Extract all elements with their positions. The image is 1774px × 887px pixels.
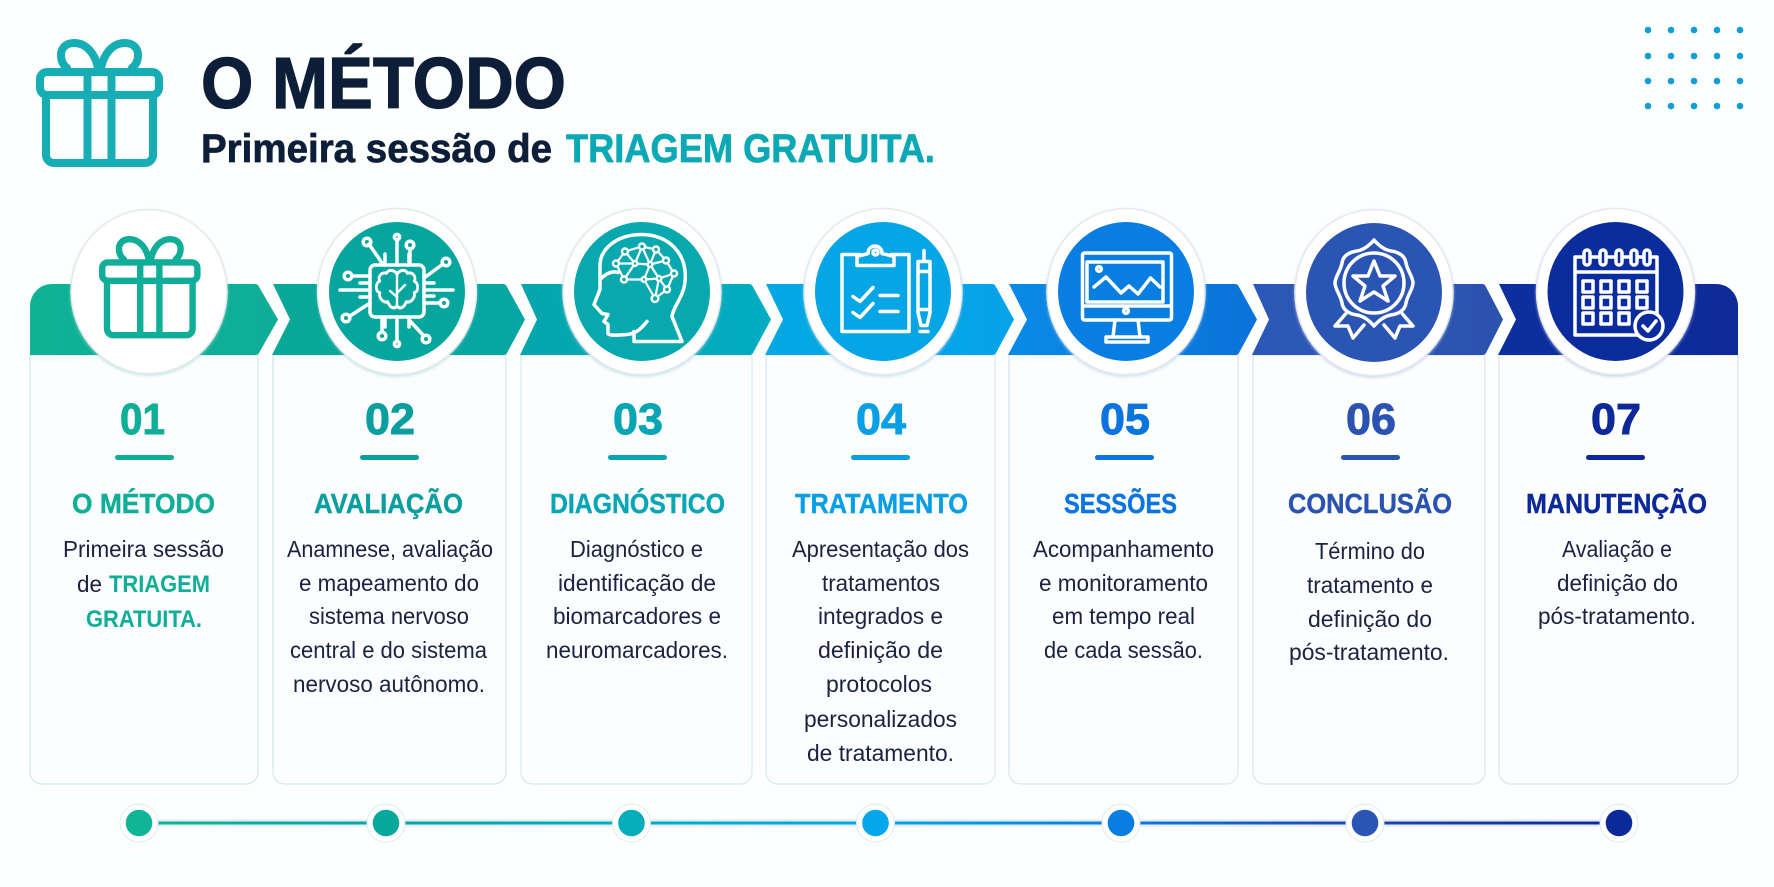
text: step 5 description: de cada sessão. xyxy=(1044,637,1203,663)
text: step 5 description xyxy=(1033,536,1214,663)
text: step 7 description: Avaliação e xyxy=(1562,536,1672,562)
heading: DIAGNÓSTICO: DIAGNÓSTICO xyxy=(550,488,725,519)
text: step 2 description: nervoso autônomo. xyxy=(293,671,485,697)
underline 6 xyxy=(1341,455,1400,460)
card 2 xyxy=(273,355,506,784)
text: step 7 description: pós-tratamento. xyxy=(1538,603,1696,629)
text: step 3 description: Diagnóstico e xyxy=(570,536,703,562)
underline 5 xyxy=(1095,455,1154,460)
text: step 4 description: definição de xyxy=(818,637,943,663)
heading: AVALIAÇÃO: AVALIAÇÃO xyxy=(314,488,463,519)
icon circle 2: circuit brain xyxy=(317,208,477,377)
heading: TRATAMENTO: TRATAMENTO xyxy=(795,488,968,519)
decorative dot grid xyxy=(1645,27,1743,109)
chevron band 2 xyxy=(272,284,525,355)
text: step 2 description: Anamnese, avaliação xyxy=(287,536,493,562)
panel: step 6 xyxy=(1252,210,1503,784)
chevron band 3 xyxy=(520,284,771,355)
heading: SESSÕES: SESSÕES xyxy=(1064,488,1177,519)
heading: CONCLUSÃO: CONCLUSÃO xyxy=(1288,488,1452,519)
text: step 1 description xyxy=(63,536,224,633)
number 06: 06 xyxy=(1346,395,1396,444)
text: step 3 description: biomarcadores e xyxy=(553,603,721,629)
text: step 6 description: definição do xyxy=(1308,606,1432,632)
text: step 3 description: neuromarcadores. xyxy=(546,637,728,663)
heading: MANUTENÇÃO: MANUTENÇÃO xyxy=(1526,488,1707,519)
underline 1 xyxy=(115,455,174,460)
underline 2 xyxy=(360,455,419,460)
text: step 4 description: de tratamento. xyxy=(807,740,954,766)
number 07: 07 xyxy=(1591,395,1641,444)
text: step 6 description: pós-tratamento. xyxy=(1289,639,1449,665)
chevron band 4 xyxy=(765,284,1014,355)
chevron band 5 xyxy=(1008,284,1257,355)
number 01: 01 xyxy=(120,395,165,444)
panel: step 2 xyxy=(272,208,525,784)
timeline xyxy=(120,804,1638,842)
panel: step 5 xyxy=(1008,208,1257,784)
text: step 3 description: identificação de xyxy=(558,570,716,596)
text: step 7 description: definição do xyxy=(1557,570,1678,596)
subtitle: Primeira sessão de xyxy=(201,127,552,171)
subtitle: TRIAGEM GRATUITA. xyxy=(566,127,935,171)
panel: step 7 xyxy=(1498,208,1738,784)
icon circle 7: calendar xyxy=(1536,208,1696,377)
card 1 xyxy=(30,355,258,784)
panel: step 1 xyxy=(30,210,278,784)
text: step 5 description: e monitoramento xyxy=(1039,570,1208,596)
text: step 2 description xyxy=(287,536,493,697)
text: step 1 description: TRIAGEM xyxy=(109,571,210,598)
icon circle 1: gift xyxy=(70,210,228,376)
number 03: 03 xyxy=(613,395,663,444)
underline 3 xyxy=(608,455,667,460)
card 7 xyxy=(1499,355,1738,784)
underline 7 xyxy=(1586,455,1645,460)
text: step 2 description: central e do sistema xyxy=(290,637,487,663)
chevron band 7 xyxy=(1498,284,1738,355)
card 3 xyxy=(521,355,752,784)
text: step 4 description xyxy=(792,536,969,766)
card 6 xyxy=(1253,355,1485,784)
underline 4 xyxy=(851,455,910,460)
text: step 5 description: em tempo real xyxy=(1052,603,1195,629)
number 05: 05 xyxy=(1100,395,1150,444)
text: step 1 description: de xyxy=(77,571,102,597)
text: step 2 description: sistema nervoso xyxy=(309,603,469,629)
number 04: 04 xyxy=(856,395,907,444)
text: step 4 description: integrados e xyxy=(818,603,943,629)
chevron band 1 xyxy=(30,284,278,355)
number 02: 02 xyxy=(365,395,415,444)
subtitle xyxy=(201,127,935,171)
text: step 2 description: e mapeamento do xyxy=(299,570,479,596)
panel: step 4 xyxy=(765,208,1014,784)
text: step 6 description: tratamento e xyxy=(1307,572,1433,598)
panel: step 3 xyxy=(520,208,771,784)
icon circle 3: head with neural network xyxy=(562,208,722,377)
text: step 4 description: protocolos xyxy=(826,671,932,697)
card 4 xyxy=(766,355,995,784)
text: step 6 description xyxy=(1289,538,1449,665)
text: step 4 description: tratamentos xyxy=(822,570,940,596)
text: step 4 description: personalizados xyxy=(804,706,957,732)
icon circle 4: clipboard and pen xyxy=(803,208,963,377)
title: O MÉTODO xyxy=(201,44,566,124)
chevron band 6 xyxy=(1252,284,1503,355)
icon: header gift xyxy=(40,43,159,163)
text: step 7 description xyxy=(1538,536,1696,629)
icon circle 6: award rosette xyxy=(1294,210,1454,378)
text: step 3 description xyxy=(546,536,728,663)
text: step 6 description: Término do xyxy=(1315,538,1425,564)
text: step 5 description: Acompanhamento xyxy=(1033,536,1214,562)
heading: O MÉTODO: O MÉTODO xyxy=(72,488,215,519)
card 5 xyxy=(1009,355,1238,784)
icon circle 5: monitor with chart xyxy=(1046,208,1206,377)
text: step 1 description: Primeira sessão xyxy=(63,536,224,562)
text: step 4 description: Apresentação dos xyxy=(792,536,969,562)
text: step 1 description: GRATUITA. xyxy=(86,606,202,633)
